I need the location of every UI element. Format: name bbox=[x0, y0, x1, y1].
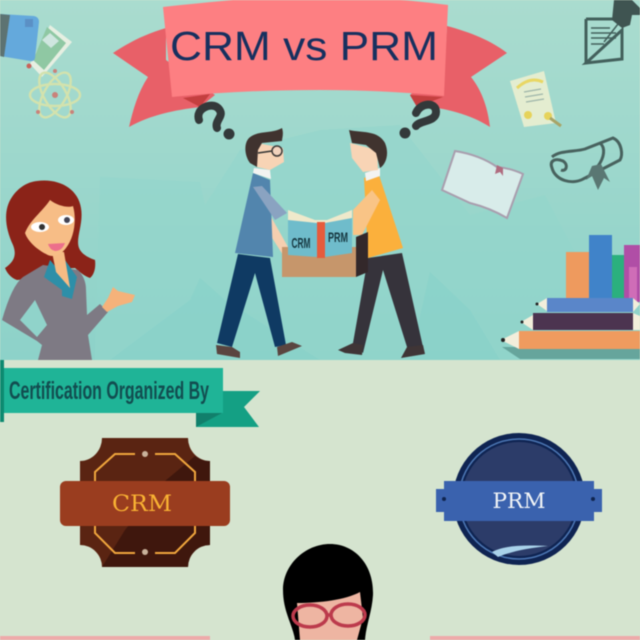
arm near bbox=[262, 215, 288, 255]
top pencil bbox=[537, 298, 547, 311]
panel: hero scene background bbox=[0, 0, 640, 360]
legs bbox=[217, 254, 286, 347]
blouse bbox=[44, 260, 77, 299]
hair bbox=[349, 130, 387, 168]
icon: right question mark bbox=[400, 105, 436, 138]
box bbox=[282, 247, 356, 277]
title text: CRM vs PRM bbox=[170, 23, 438, 69]
shoes bbox=[338, 343, 363, 355]
icon: pinned note bbox=[586, 0, 640, 63]
jacket bbox=[2, 265, 108, 360]
CRM label: CRM bbox=[292, 235, 310, 252]
man with glasses bbox=[216, 128, 302, 358]
icon: open book bbox=[442, 151, 523, 218]
badge: CRM bbox=[60, 438, 230, 567]
CRM badge label: CRM bbox=[112, 492, 172, 517]
hair bbox=[245, 128, 283, 167]
face bbox=[257, 143, 284, 170]
collar bbox=[365, 168, 380, 181]
panel: certification background bbox=[0, 360, 640, 640]
section heading: Certification Organized By bbox=[9, 377, 209, 405]
icon: left question mark bbox=[198, 106, 234, 140]
torso bbox=[364, 172, 403, 258]
bottom pencil bbox=[501, 331, 519, 349]
pink panels at bottom bbox=[0, 636, 640, 640]
PRM label: PRM bbox=[328, 229, 348, 245]
hand bbox=[102, 287, 135, 312]
icon: scroll bbox=[551, 138, 622, 190]
open book bbox=[288, 210, 352, 226]
icon: notebooks bbox=[0, 14, 72, 77]
middle pencil bbox=[521, 315, 533, 330]
shoes bbox=[216, 345, 240, 358]
face bbox=[25, 200, 75, 256]
hair bbox=[5, 180, 95, 280]
torso bbox=[235, 173, 273, 257]
box and book bbox=[282, 210, 368, 277]
legs bbox=[353, 253, 423, 353]
woman with red hair bbox=[2, 180, 135, 360]
face bbox=[350, 143, 378, 172]
neck bbox=[52, 252, 70, 288]
book and pencil stack bbox=[501, 235, 640, 359]
woman with glasses bbox=[283, 544, 373, 640]
PRM badge label: PRM bbox=[492, 489, 546, 513]
section ribbon bbox=[0, 360, 260, 427]
icon: certificate bbox=[510, 71, 561, 127]
arm bbox=[353, 190, 380, 235]
badge: PRM bbox=[436, 433, 602, 565]
man in yellow shirt bbox=[338, 130, 425, 358]
title ribbon bbox=[113, 0, 507, 127]
icon: atom bbox=[30, 68, 80, 122]
neck collar bbox=[253, 168, 271, 179]
glasses bbox=[258, 151, 272, 153]
